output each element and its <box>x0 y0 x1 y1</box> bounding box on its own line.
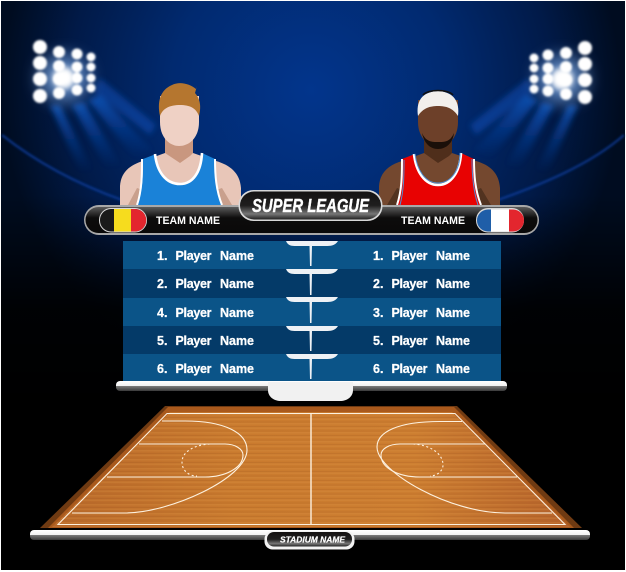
floodlight right <box>470 41 592 172</box>
right team players: 6. <box>373 362 383 376</box>
court lines <box>58 414 565 524</box>
right team players: Player <box>392 249 428 263</box>
right team players: Player <box>392 334 428 348</box>
player roster table <box>123 241 501 381</box>
flag: France <box>476 208 524 232</box>
player: right team <box>379 90 500 206</box>
right team players: Name <box>436 362 470 376</box>
court front rail <box>30 530 590 540</box>
right team players: Player <box>392 277 428 291</box>
flag: Belgium <box>99 208 147 232</box>
super league title pill: SUPER LEAGUE <box>252 196 370 216</box>
left team players: Name <box>220 362 254 376</box>
left team players: 2. <box>157 277 167 291</box>
center dividers <box>286 241 338 379</box>
left team players: Name <box>220 277 254 291</box>
right team players: Name <box>436 306 470 320</box>
player: left team <box>120 83 241 206</box>
left team players: 1. <box>157 249 167 263</box>
left team players: 4. <box>157 306 167 320</box>
left team players: Player <box>176 306 212 320</box>
team name scoreboard bar <box>84 205 539 235</box>
left team players: 6. <box>157 362 167 376</box>
right team players: Player <box>392 362 428 376</box>
right team players: Name <box>436 249 470 263</box>
team name left: TEAM NAME <box>156 215 220 227</box>
right team players: Name <box>436 334 470 348</box>
floodlight left <box>33 40 156 172</box>
left team players: Name <box>220 249 254 263</box>
left team players: 5. <box>157 334 167 348</box>
right team players: Player <box>392 306 428 320</box>
team name right: TEAM NAME <box>401 215 465 227</box>
left team players: Player <box>176 362 212 376</box>
left team players: Player <box>176 277 212 291</box>
left team players: Player <box>176 249 212 263</box>
left team players: Name <box>220 334 254 348</box>
stadium name pill: STADIUM NAME <box>280 536 346 544</box>
super league title pill <box>238 190 382 221</box>
right team players: Name <box>436 277 470 291</box>
right team players: 5. <box>373 334 383 348</box>
right team players <box>373 249 470 376</box>
basketball court <box>40 406 582 528</box>
stadium name pill <box>264 531 354 550</box>
left team players <box>157 249 254 376</box>
right team players: 3. <box>373 306 383 320</box>
left team players: Player <box>176 334 212 348</box>
right team players: 2. <box>373 277 383 291</box>
table shelf <box>116 381 507 401</box>
left team players: Name <box>220 306 254 320</box>
right team players: 1. <box>373 249 383 263</box>
blue light streaks <box>2 135 624 200</box>
